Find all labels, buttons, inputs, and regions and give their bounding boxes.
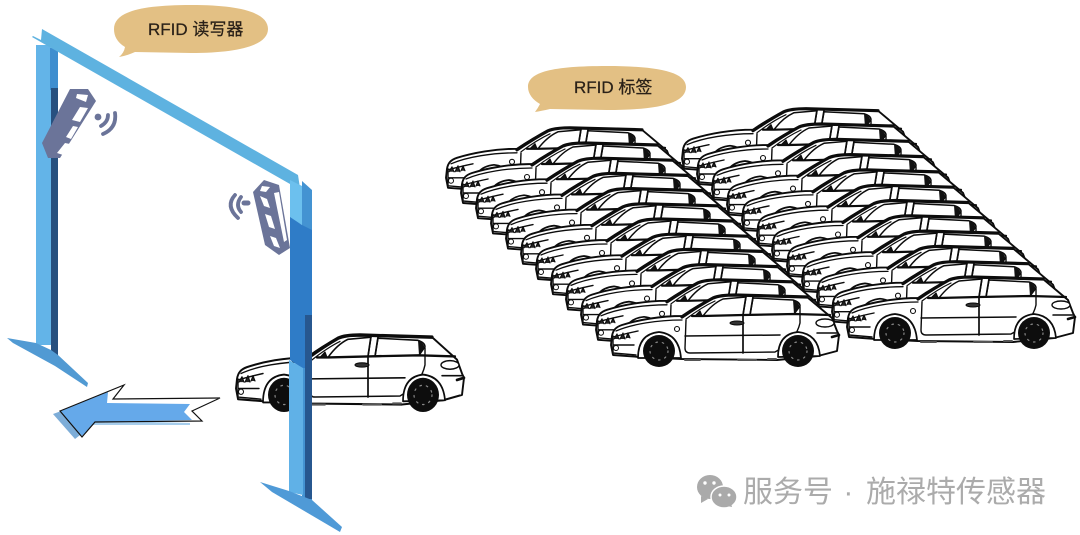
car stack: left group of RFID tagged cars — [446, 128, 839, 367]
car passing through the gate — [236, 335, 464, 412]
icon: chat bubbles — [697, 475, 737, 508]
top beam — [32, 29, 300, 188]
callout: RFID tag: RFID 标签 — [574, 78, 652, 97]
callout: RFID tag — [528, 66, 686, 112]
icon: right RFID antenna — [231, 180, 290, 255]
gate: RFID portal frame — [7, 29, 342, 532]
arrow: direction of travel — [53, 385, 220, 439]
watermark text: · — [835, 476, 862, 509]
callout: RFID reader: RFID 读写器 — [148, 20, 243, 39]
watermark text: 施禄特传感器 — [866, 476, 1046, 509]
watermark text: 服务号 — [743, 476, 833, 509]
right post — [289, 180, 312, 500]
car stack: right group of RFID tagged cars — [682, 109, 1075, 349]
callout: RFID reader — [114, 5, 268, 57]
right foot — [260, 482, 342, 532]
watermark — [697, 475, 1046, 509]
icon: left RFID antenna — [42, 89, 115, 158]
signal waves — [95, 113, 115, 134]
left foot — [7, 338, 88, 387]
signal waves — [231, 195, 248, 218]
left post — [36, 45, 58, 356]
